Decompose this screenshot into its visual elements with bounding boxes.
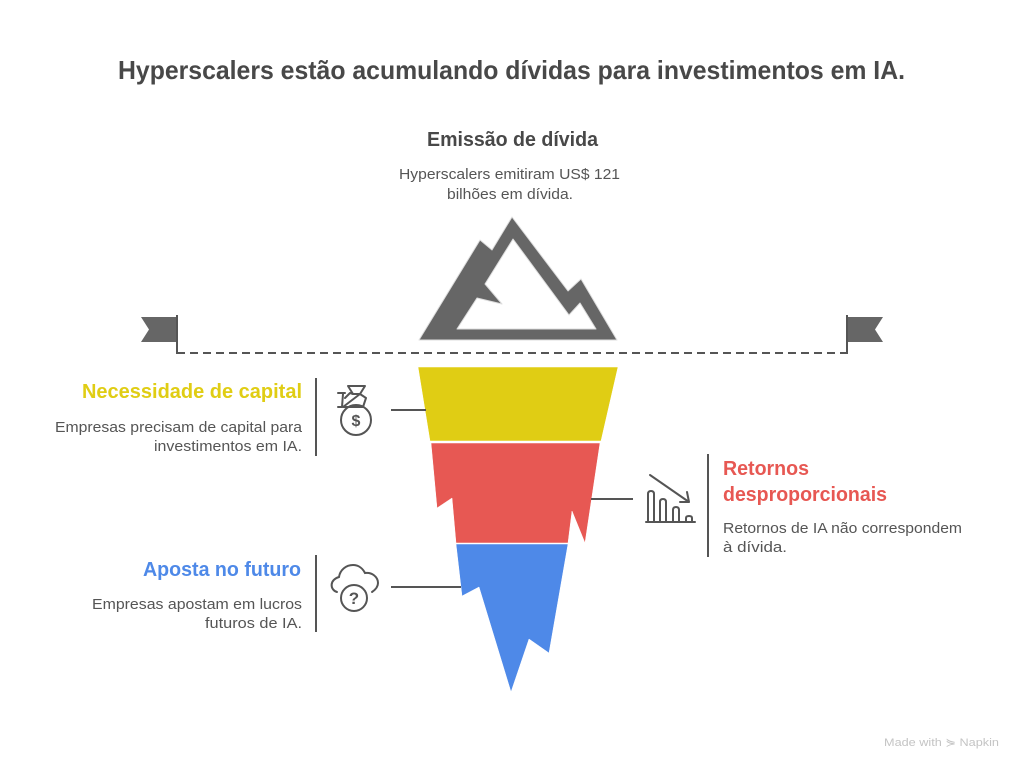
waterline <box>177 352 847 354</box>
divider <box>315 555 317 632</box>
description: à dívida. <box>723 540 787 556</box>
connector: blue <box>391 586 461 588</box>
segment: blue <box>456 544 568 692</box>
text: Emissão de dívida description: Hyperscalers emitiram US$ 121 <box>399 167 620 183</box>
heading: desproporcionais <box>723 484 887 506</box>
panel: Aposta no futuro <box>92 555 378 632</box>
title: Hyperscalers estão acumulando dívidas para investimentos em IA. <box>118 55 905 85</box>
heading: Aposta no futuro <box>143 559 301 581</box>
connector: red <box>591 498 633 500</box>
description: futuros de IA. <box>205 616 302 632</box>
icon: cloud question: ? <box>349 589 359 608</box>
panel: Retornos desproporcionais <box>646 454 962 557</box>
description: Empresas precisam de capital para <box>55 420 303 436</box>
description: Retornos de IA não correspondem <box>723 521 962 537</box>
heading: Retornos <box>723 458 809 480</box>
description <box>55 420 303 455</box>
connector: yellow <box>391 409 426 411</box>
description: Empresas apostam em lucros <box>92 597 302 613</box>
divider <box>707 454 709 557</box>
segment: red <box>431 443 600 543</box>
icon: money bag <box>338 386 371 435</box>
divider <box>315 378 317 456</box>
heading: Emissão de dívida: Emissão de dívida <box>427 129 599 151</box>
icon: left flag <box>141 315 177 354</box>
icon: cloud question <box>332 565 378 611</box>
panel: Necessidade de capital <box>55 378 371 456</box>
description <box>723 521 962 556</box>
icon: mountain <box>419 217 617 340</box>
description: investimentos em IA. <box>154 439 302 455</box>
icon: money bag: $ <box>352 413 361 430</box>
icon: right flag <box>847 315 883 354</box>
icon: falling bar chart <box>646 475 695 522</box>
heading: Necessidade de capital <box>82 381 302 403</box>
watermark: Made with ⋟ Napkin <box>884 737 999 749</box>
text: Emissão de dívida description <box>399 167 620 203</box>
segment: yellow <box>418 367 618 441</box>
text: Emissão de dívida description: bilhões em dívida. <box>447 187 573 203</box>
description <box>92 597 302 632</box>
iceberg funnel <box>418 367 618 692</box>
